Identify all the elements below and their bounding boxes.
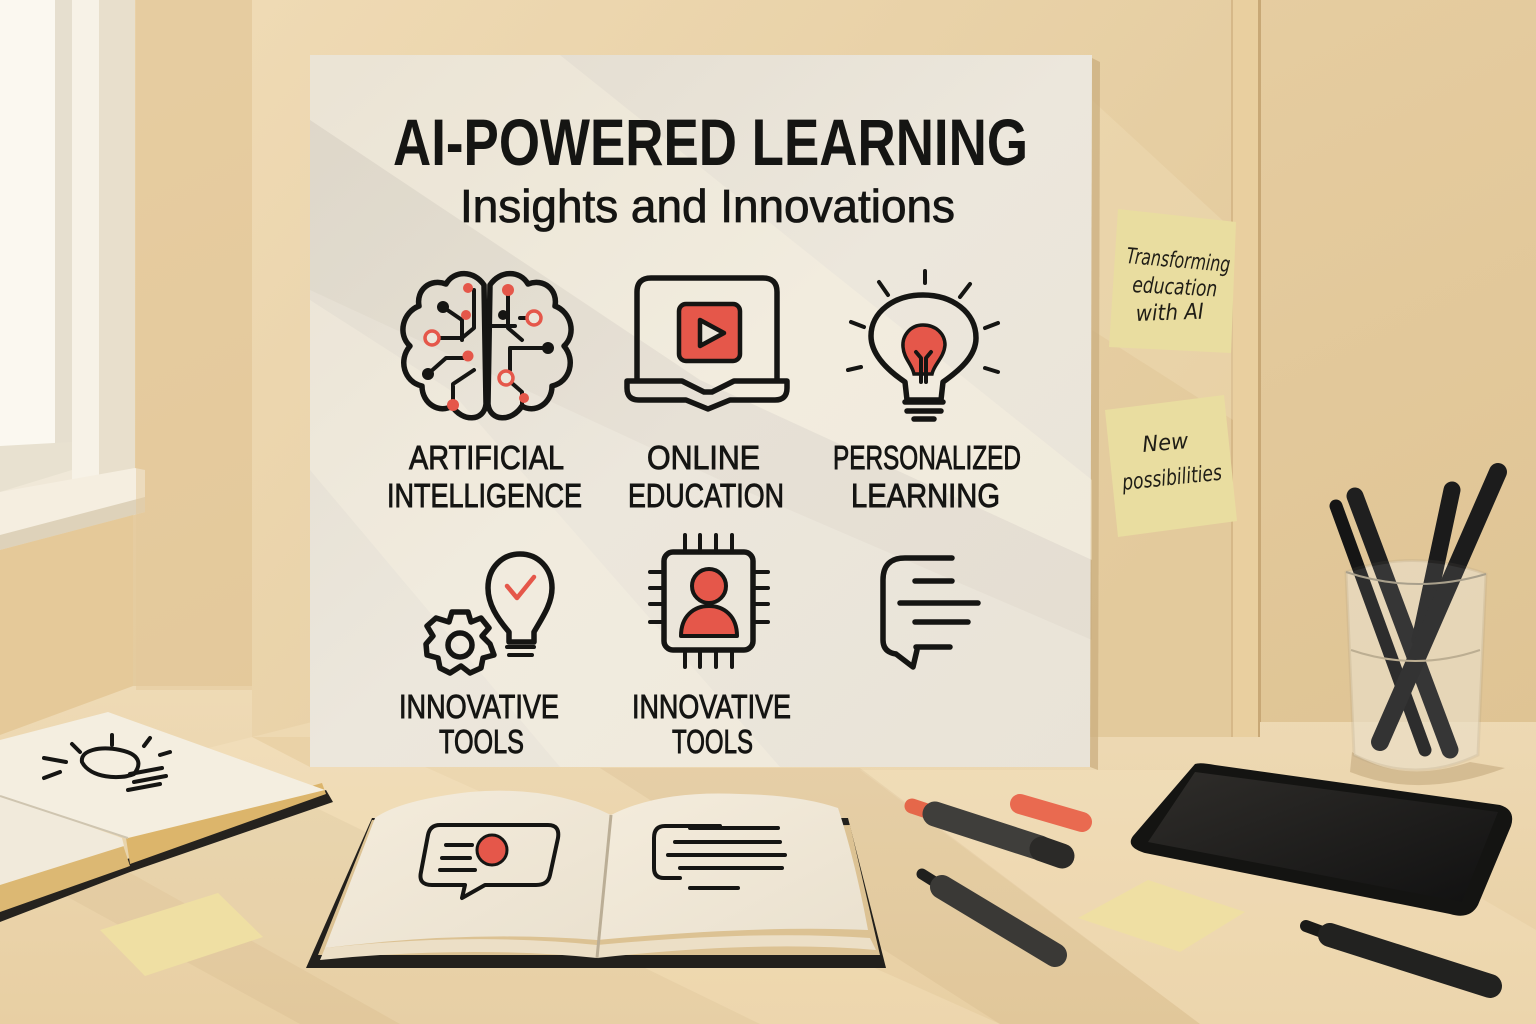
icon: speech bubble with lines [883, 558, 978, 667]
poster panel [310, 55, 1092, 767]
sticky note on desk left [100, 893, 263, 976]
icon: light bulb with rays [848, 271, 998, 419]
poster shadow [1090, 58, 1100, 770]
sticky note: new possibilities [1105, 395, 1237, 537]
sticky note: transforming education: Transforming [1125, 244, 1231, 278]
title: AI-POWERED LEARNING [393, 105, 1028, 179]
desk surface [0, 686, 1536, 1024]
label: innovative tools second [632, 688, 791, 760]
wooden backing board [252, 0, 1261, 737]
icon: chip with person [650, 535, 768, 667]
label: personalized learning: PERSONALIZED [833, 439, 1021, 476]
icon: gear with light bulb and check [426, 554, 552, 673]
subtitle: Insights and Innovations [460, 180, 955, 232]
label: online education: ONLINE [647, 439, 760, 476]
sticky note: transforming education: education [1132, 273, 1218, 302]
icon: notebook text lines [654, 826, 785, 888]
label: innovative tools [399, 688, 559, 760]
sticky note on desk right [1078, 880, 1245, 952]
label: artificial intelligence: INTELLIGENCE [387, 477, 582, 514]
label: innovative tools: INNOVATIVE [399, 688, 559, 725]
label: artificial intelligence [387, 439, 582, 514]
label: innovative tools: TOOLS [439, 723, 524, 760]
icon: brain with circuits [403, 274, 571, 418]
sticky note: new possibilities: New [1141, 429, 1190, 458]
window [0, 0, 145, 735]
label: innovative tools second: TOOLS [672, 723, 753, 760]
label: artificial intelligence: ARTIFICIAL [409, 439, 564, 476]
wall background [0, 0, 1536, 740]
sticky note: new possibilities: possibilities [1120, 461, 1223, 496]
icon: notebook speech bubble [420, 825, 558, 898]
sticky note: transforming education [1109, 209, 1236, 353]
open notebook center [306, 791, 886, 968]
glass with pens [1336, 472, 1505, 785]
sticky note: transforming education: with AI [1135, 300, 1204, 327]
label: online education [628, 439, 784, 514]
tablet [1131, 763, 1512, 916]
marker pens on desk [912, 804, 1490, 986]
label: innovative tools second: INNOVATIVE [632, 688, 791, 725]
label: personalized learning: LEARNING [851, 477, 1000, 514]
notebook left [0, 712, 333, 922]
label: online education: EDUCATION [628, 477, 784, 514]
icon: sketched bulb [44, 735, 170, 790]
icon: laptop with video play [627, 278, 787, 409]
label: personalized learning [833, 439, 1021, 514]
